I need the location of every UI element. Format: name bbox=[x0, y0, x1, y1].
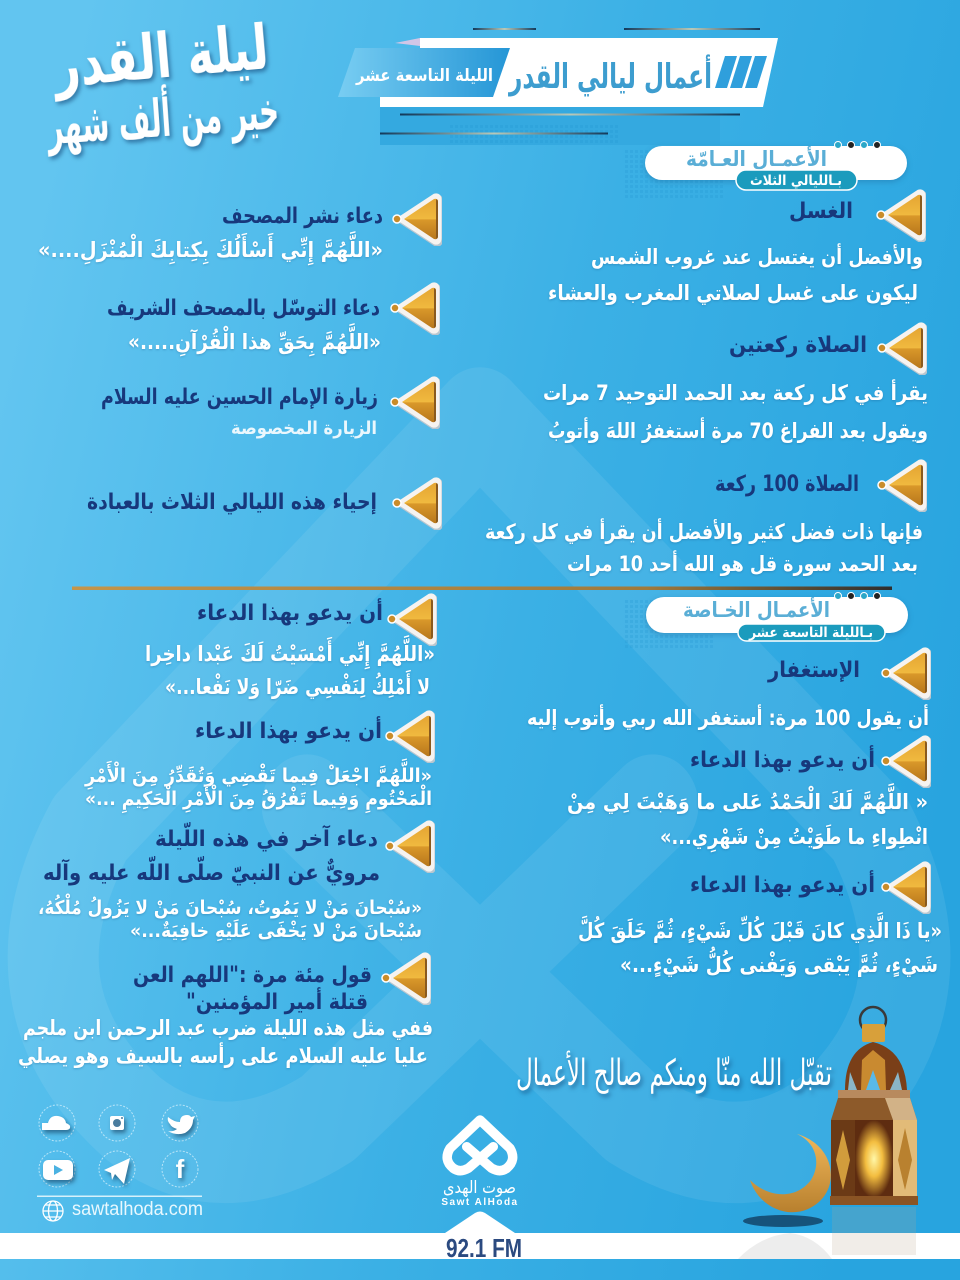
calligraphy: laylat al-qadr bbox=[43, 10, 281, 157]
icon: marker bbox=[388, 596, 435, 644]
icon: soundcloud bbox=[42, 1116, 70, 1130]
icon: marker bbox=[877, 192, 924, 240]
icon: marker bbox=[382, 955, 429, 1003]
title text: أعمال ليالي القدر bbox=[508, 54, 712, 97]
heading: dua 3: أن يدعو بهذا الدعاء bbox=[197, 597, 383, 626]
icon: marker bbox=[393, 196, 440, 244]
logo mark bbox=[447, 1120, 513, 1171]
hundred rakaat text: بعد الحمد سورة قل هو الله أحد 10 مرات bbox=[567, 549, 918, 576]
panel: general deeds right column bbox=[485, 192, 928, 576]
istighfar text: أن يقول 100 مرة: أستغفر الله ربي وأتوب إليه bbox=[527, 703, 929, 730]
panel: general deeds left column bbox=[38, 196, 440, 528]
closing text: عليا عليه السلام على رأسه بالسيف وهو يصلي bbox=[18, 1041, 428, 1068]
panel: special deeds right column bbox=[527, 650, 942, 978]
dua text: «اللَّهُمَّ اجْعَلْ فِيما تَقْضِي وَتُقَدِّرُ مِنَ الْأَمْرِ bbox=[84, 759, 432, 790]
dua text: «سُبْحانَ مَنْ لا يَمُوتُ، سُبْحانَ مَنْ لا يَزُولُ مُلْكُهُ، bbox=[38, 893, 422, 919]
social icons bbox=[39, 1105, 198, 1187]
icon: globe bbox=[43, 1201, 63, 1221]
heading: two rakaat prayer: الصلاة ركعتين bbox=[729, 333, 867, 358]
icon: marker bbox=[882, 864, 929, 912]
night label: الليلة التاسعة عشر bbox=[355, 66, 493, 86]
calligraphy: laylat al-qadr: ليلة القدر bbox=[49, 10, 271, 102]
dua text bbox=[84, 759, 432, 814]
closing text bbox=[18, 1016, 433, 1068]
heading: dua 2: أن يدعو بهذا الدعاء bbox=[690, 869, 875, 898]
ziyarat text: الزيارة المخصوصة bbox=[231, 418, 377, 439]
section header: special deeds: بـالليلة التاسعة عشر bbox=[748, 625, 873, 641]
dua text bbox=[38, 893, 422, 942]
icon: marker bbox=[878, 462, 925, 510]
icon: marker bbox=[391, 285, 438, 333]
heading: istighfar: الإستغفار bbox=[767, 658, 860, 683]
icon: marker bbox=[882, 738, 929, 786]
icon: three slashes bbox=[715, 56, 767, 88]
icon: youtube bbox=[43, 1160, 73, 1180]
crescent moon bbox=[738, 1134, 832, 1259]
bottom white band bbox=[0, 1233, 960, 1259]
heading: curse: قتلة أمير المؤمنين" bbox=[186, 986, 368, 1015]
hundred rakaat text bbox=[485, 517, 923, 576]
heading: dua 5: دعاء آخر في هذه اللّيلة bbox=[155, 822, 378, 852]
icon: marker bbox=[878, 325, 925, 373]
heading: vigil: إحياء هذه الليالي الثلاث بالعبادة bbox=[87, 490, 377, 515]
section header: special deeds: الأعمـال الخـاصة bbox=[683, 596, 830, 622]
icon: marker bbox=[386, 713, 433, 761]
icon: marker bbox=[391, 379, 438, 427]
heading: tawassul dua: دعاء التوسّل بالمصحف الشريف bbox=[107, 296, 380, 321]
lantern bbox=[830, 1007, 918, 1255]
heading: ziyarat: زيارة الإمام الحسين عليه السلام bbox=[101, 385, 378, 410]
website address: sawtalhoda.com bbox=[72, 1199, 203, 1220]
heading: ghusl: الغسل bbox=[789, 199, 853, 224]
frequency: 92.1 FM bbox=[446, 1233, 522, 1263]
icon: facebook: f bbox=[176, 1154, 185, 1184]
panel: special deeds left column bbox=[18, 596, 435, 1068]
heading: dua 5: مرويٌّ عن النبيّ صلّى اللّه عليه وآله bbox=[43, 856, 380, 886]
dua text: «اللَّهُمَّ إِنِّي أَمْسَيْتُ لَكَ عَبْدا داخِرا bbox=[145, 634, 435, 670]
dua text bbox=[578, 911, 942, 978]
dua text bbox=[145, 634, 435, 699]
icon: marker bbox=[393, 480, 440, 528]
dua text: «اللَّهُمَّ بِحَقِّ هذا الْقُرْآنِ.....» bbox=[128, 322, 381, 357]
section header: general deeds bbox=[625, 142, 907, 198]
two rakaat text bbox=[543, 378, 928, 443]
divider: gold line bbox=[72, 586, 892, 590]
heading: dua 1: أن يدعو بهذا الدعاء bbox=[690, 744, 875, 773]
heading: hundred rakaat: الصلاة 100 ركعة bbox=[715, 472, 859, 497]
dua text: لا أَمْلِكُ لِنَفْسِي ضَرّا وَلا نَفْعا...» bbox=[165, 669, 430, 699]
section header: general deeds: بـالليالي الثلاث bbox=[750, 173, 842, 189]
ghusl text bbox=[548, 242, 923, 305]
ghusl text: ليكون على غسل لصلاتي المغرب والعشاء bbox=[548, 281, 918, 305]
dua text: سُبْحانَ مَنْ لا يَخْفَى عَلَيْهِ خافِيَةٌ...» bbox=[130, 919, 422, 942]
website line bbox=[37, 1196, 203, 1221]
closing text: ففي مثل هذه الليلة ضرب عبد الرحمن ابن ملجم bbox=[23, 1016, 433, 1040]
icon: twitter bbox=[168, 1115, 195, 1134]
dua text: الْمَحْتُومِ وَفِيما تَفْرُقُ مِنَ الْأَمْرِ الْحَكِيمِ ...» bbox=[85, 783, 432, 814]
triangle bbox=[445, 1212, 515, 1233]
logo: sawt al-hoda bbox=[441, 1120, 522, 1263]
heading: dua 4: أن يدعو بهذا الدعاء bbox=[195, 715, 382, 744]
background watermark logo bbox=[53, 418, 905, 1152]
heading: curse: قول مئة مرة :"اللهم العن bbox=[133, 963, 372, 988]
section header: special deeds bbox=[625, 592, 908, 650]
dua text: «اللَّهُمَّ إِنِّي أَسْأَلُكَ بِكِتابِكَ الْمُنْزَلِ....» bbox=[38, 230, 383, 266]
title banner bbox=[338, 28, 778, 145]
icon: telegram bbox=[104, 1158, 130, 1184]
heading: mushaf dua: دعاء نشر المصحف bbox=[222, 204, 383, 229]
dua text: « اللَّهُمَّ لَكَ الْحَمْدُ عَلى ما وَهَبْتَ لِي مِنْ bbox=[567, 782, 928, 814]
icon: marker bbox=[386, 823, 433, 871]
section header: general deeds: الأعمـال العـامّة bbox=[686, 145, 827, 171]
icon: instagram bbox=[110, 1116, 124, 1130]
icon: marker bbox=[882, 650, 929, 698]
heading: dua 5 bbox=[43, 822, 380, 886]
two rakaat text: ويقول بعد الفراغ 70 مرة أستغفرُ اللهَ وأتوبُ bbox=[548, 416, 928, 443]
heading: curse bbox=[133, 963, 372, 1015]
logo arabic name: صوت الهدى bbox=[443, 1178, 516, 1198]
dua text bbox=[567, 782, 928, 853]
calligraphy: laylat al-qadr: خير من ألف شهر bbox=[43, 76, 281, 157]
logo latin name: Sawt AlHoda bbox=[441, 1197, 519, 1208]
